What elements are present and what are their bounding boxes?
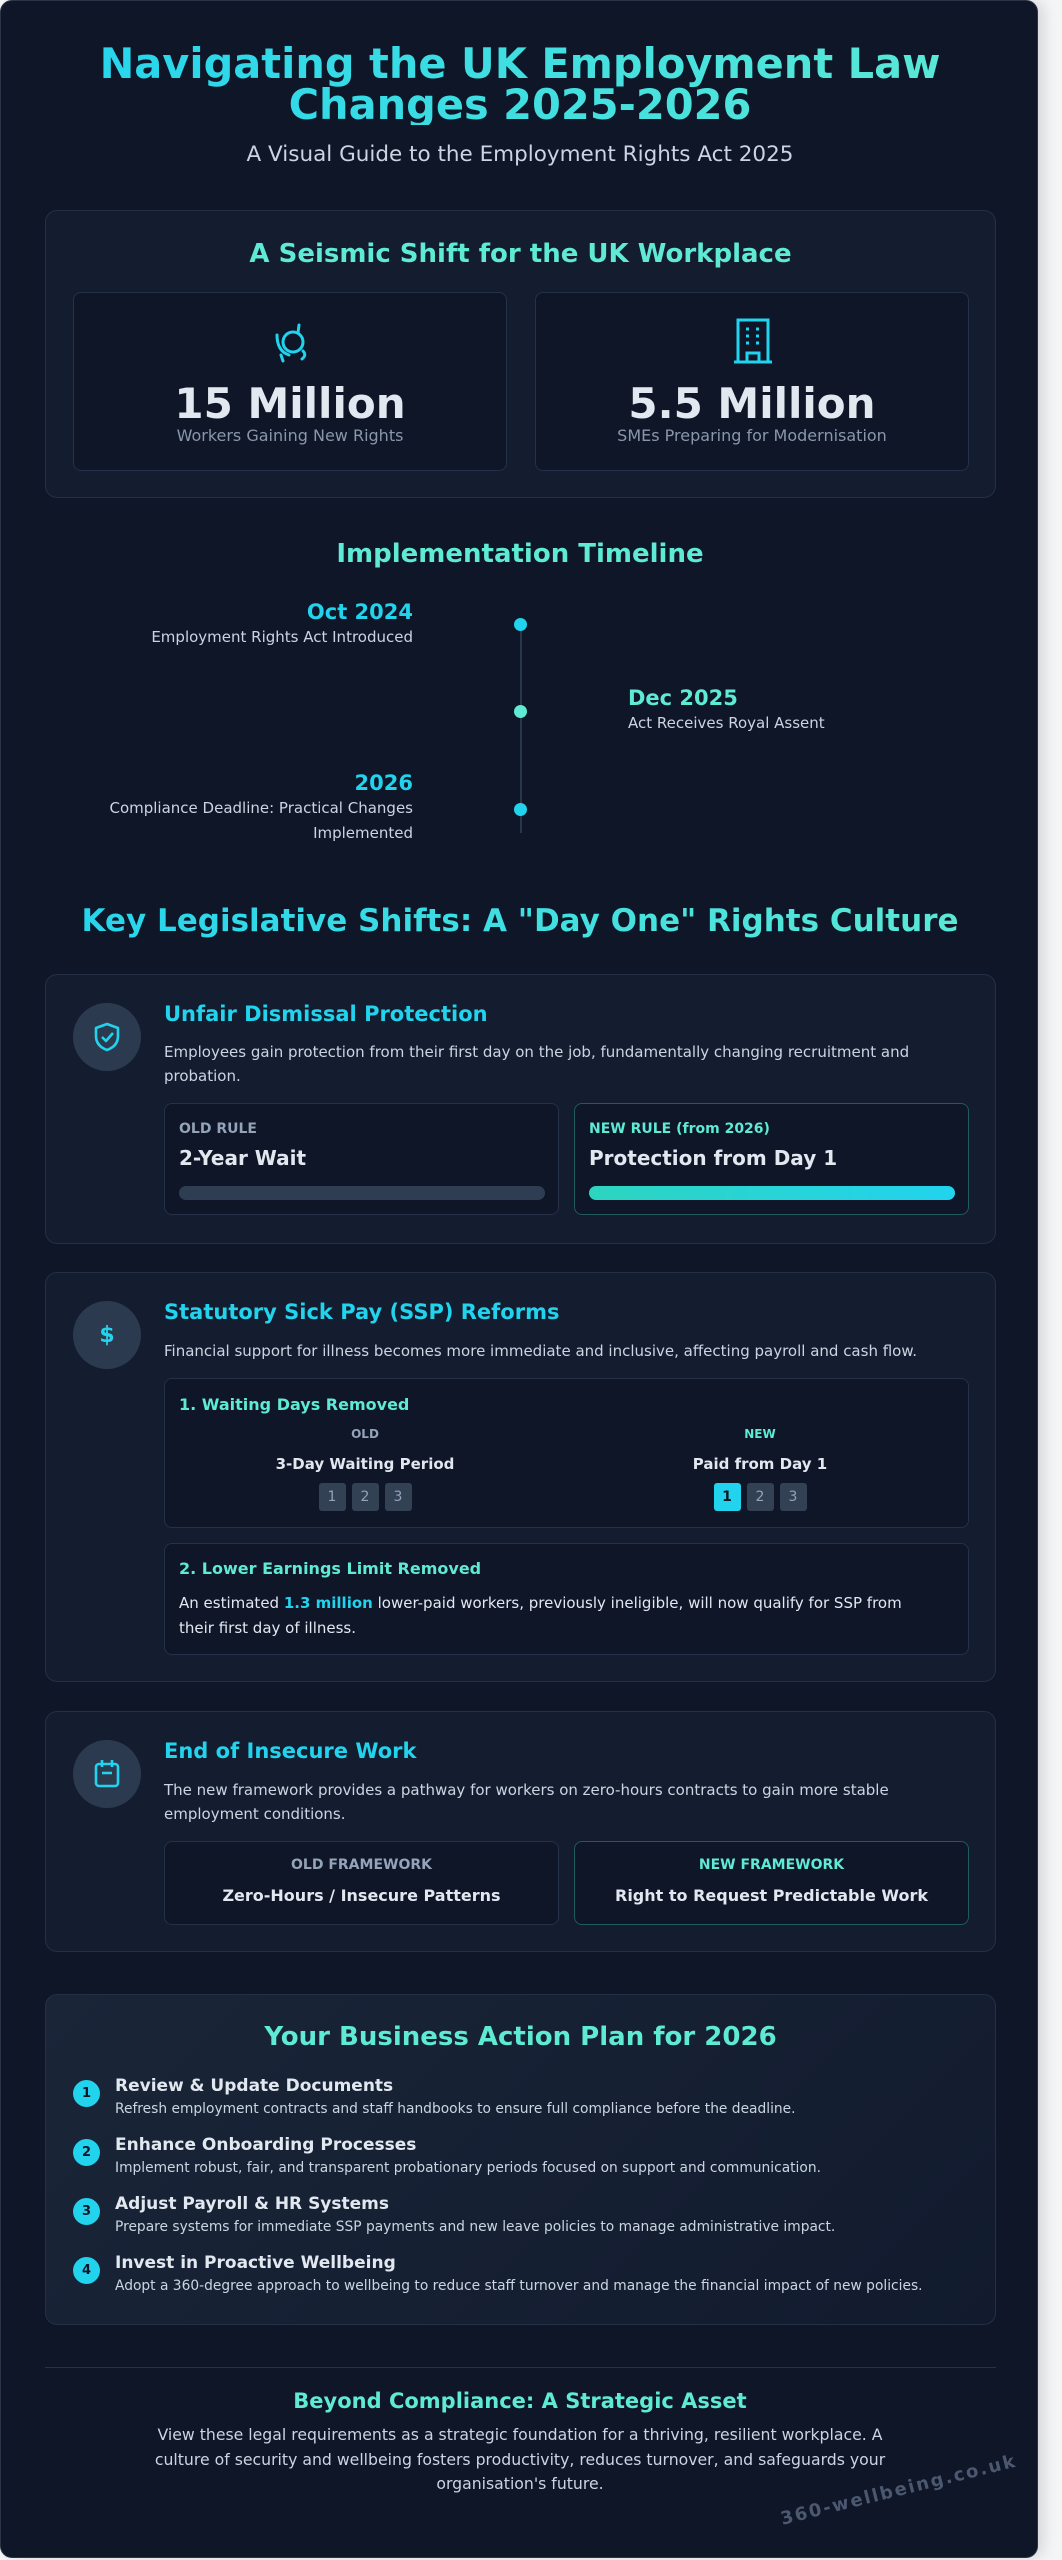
- item 4: Adopt a 360-degree approach to wellbeing to reduce staff turnover and manage the financial impact of new policies.: [115, 2278, 923, 2294]
- old: 1: [328, 1489, 336, 1505]
- event: oct 2024: Employment Rights Act Introduced: [151, 628, 413, 646]
- item 1: [73, 2076, 796, 2117]
- bar: old: [179, 1186, 545, 1200]
- old rule: 2-Year Wait: [179, 1146, 306, 1170]
- old rule: OLD RULE: [179, 1121, 257, 1137]
- item 3: [73, 2194, 835, 2235]
- old: [276, 1427, 454, 1511]
- new: 3: [789, 1489, 797, 1505]
- item 1: Review & Update Documents: [115, 2076, 393, 2096]
- label: Workers Gaining New Rights: [177, 426, 403, 445]
- panel: SSP: [45, 1272, 996, 1682]
- item 2: [73, 2135, 821, 2176]
- title: End of Insecure Work: [164, 1739, 416, 1763]
- title: Changes 2025-2026: [289, 80, 751, 129]
- heading: seismic shift: A Seismic Shift for the UK Workplace: [249, 239, 792, 269]
- item 4: [73, 2253, 923, 2294]
- event: 2026: [109, 771, 413, 842]
- box: lower earnings: 2. Lower Earnings Limit Removed: [179, 1559, 481, 1578]
- icon: shield: [73, 1003, 141, 1071]
- item 3: 3: [82, 2204, 91, 2219]
- new rule: Protection from Day 1: [589, 1146, 837, 1170]
- description: Employees gain protection from their first day on the job, fundamentally changing recruitment and probation.: [164, 1043, 909, 1085]
- event: oct 2024: [151, 600, 413, 646]
- panel: insecure work: [45, 1711, 996, 1952]
- stat: 15 million workers: [73, 292, 507, 471]
- event: dec 2025: Dec 2025: [628, 686, 738, 710]
- box: waiting days: [164, 1378, 969, 1528]
- label: SMEs Preparing for Modernisation: [617, 426, 887, 445]
- new: 1: [722, 1489, 732, 1505]
- heading: beyond compliance: Beyond Compliance: A Strategic Asset: [293, 2389, 747, 2413]
- icon: people: [276, 324, 306, 362]
- new rule: [574, 1103, 969, 1215]
- box: waiting days: 1. Waiting Days Removed: [179, 1395, 409, 1414]
- new: Paid from Day 1: [693, 1455, 827, 1473]
- item 3: Adjust Payroll & HR Systems: [115, 2194, 389, 2214]
- event: dec 2025: Act Receives Royal Assent: [628, 714, 825, 732]
- old: 3-Day Waiting Period: [276, 1455, 454, 1473]
- bar: new: [589, 1186, 955, 1200]
- title: Statutory Sick Pay (SSP) Reforms: [164, 1300, 559, 1324]
- item 1: 1: [82, 2086, 91, 2101]
- number: 15 Million: [174, 379, 406, 428]
- new framework: [574, 1841, 969, 1925]
- subtitle: A Visual Guide to the Employment Rights Act 2025: [247, 142, 793, 167]
- description: Financial support for illness becomes more immediate and inclusive, affecting payroll and cash flow.: [164, 1342, 917, 1360]
- title: Unfair Dismissal Protection: [164, 1002, 488, 1026]
- old framework: Zero-Hours / Insecure Patterns: [222, 1886, 501, 1905]
- event: oct 2024: Oct 2024: [307, 600, 413, 624]
- panel: seismic shift: [45, 210, 996, 498]
- event: dec 2025: [628, 686, 825, 732]
- old: 3: [394, 1489, 402, 1505]
- stat: 5.5 million SMEs: [535, 292, 969, 471]
- new framework: NEW FRAMEWORK: [699, 1857, 844, 1873]
- old framework: OLD FRAMEWORK: [291, 1857, 432, 1873]
- new framework: Right to Request Predictable Work: [615, 1886, 928, 1905]
- heading: timeline: Implementation Timeline: [336, 539, 704, 569]
- item 2: 2: [82, 2145, 91, 2160]
- heading: key legislative shifts: Key Legislative Shifts: A "Day One" Rights Culture: [81, 903, 959, 939]
- title: [1, 43, 1039, 125]
- description: The new framework provides a pathway for workers on zero-hours contracts to gain more stable employment conditions.: [164, 1781, 889, 1823]
- old: 2: [361, 1489, 369, 1505]
- panel: unfair dismissal: [45, 974, 996, 1244]
- old: OLD: [351, 1427, 379, 1441]
- number: 5.5 Million: [628, 379, 876, 428]
- panel: action plan: [45, 1994, 996, 2325]
- icon: dollar: [73, 1301, 141, 1369]
- new: NEW: [744, 1427, 776, 1441]
- item 4: Invest in Proactive Wellbeing: [115, 2253, 396, 2273]
- dot: dec 2025: [514, 705, 527, 718]
- box: lower earnings: An estimated 1.3 million lower-paid workers, previously ineligible, will now qualify for SSP from their first day of illness.: [179, 1594, 902, 1637]
- closing text: View these legal requirements as a strategic foundation for a thriving, resilient workplace. A culture of security and wellbeing fosters productivity, reduces turnover, and safeguards your organisation's future.: [155, 2425, 885, 2493]
- box: lower earnings: [164, 1543, 969, 1655]
- watermark: 360-wellbeing.co.uk: [778, 2451, 1019, 2530]
- item 2: Enhance Onboarding Processes: [115, 2135, 416, 2155]
- heading: Your Business Action Plan for 2026: [264, 2022, 777, 2052]
- old framework: [164, 1841, 559, 1925]
- icon: building: [734, 318, 772, 364]
- icon: calendar: [73, 1740, 141, 1808]
- item 2: Implement robust, fair, and transparent probationary periods focused on support and communication.: [115, 2160, 821, 2176]
- new rule: NEW RULE (from 2026): [589, 1121, 770, 1137]
- dot: oct 2024: [514, 618, 527, 631]
- item 3: Prepare systems for immediate SSP payments and new leave policies to manage administrative impact.: [115, 2219, 835, 2235]
- new: 2: [756, 1489, 764, 1505]
- dot: 2026: [514, 803, 527, 816]
- icon: dollar: $: [99, 1322, 115, 1348]
- new: [693, 1427, 827, 1511]
- item 1: Refresh employment contracts and staff handbooks to ensure full compliance before the deadline.: [115, 2101, 796, 2117]
- event: 2026: Compliance Deadline: Practical Changes Implemented: [109, 799, 413, 842]
- timeline: [109, 600, 825, 842]
- title: Navigating the UK Employment Law: [100, 39, 940, 88]
- old rule: [164, 1103, 559, 1215]
- event: 2026: 2026: [355, 771, 413, 795]
- item 4: 4: [82, 2263, 91, 2278]
